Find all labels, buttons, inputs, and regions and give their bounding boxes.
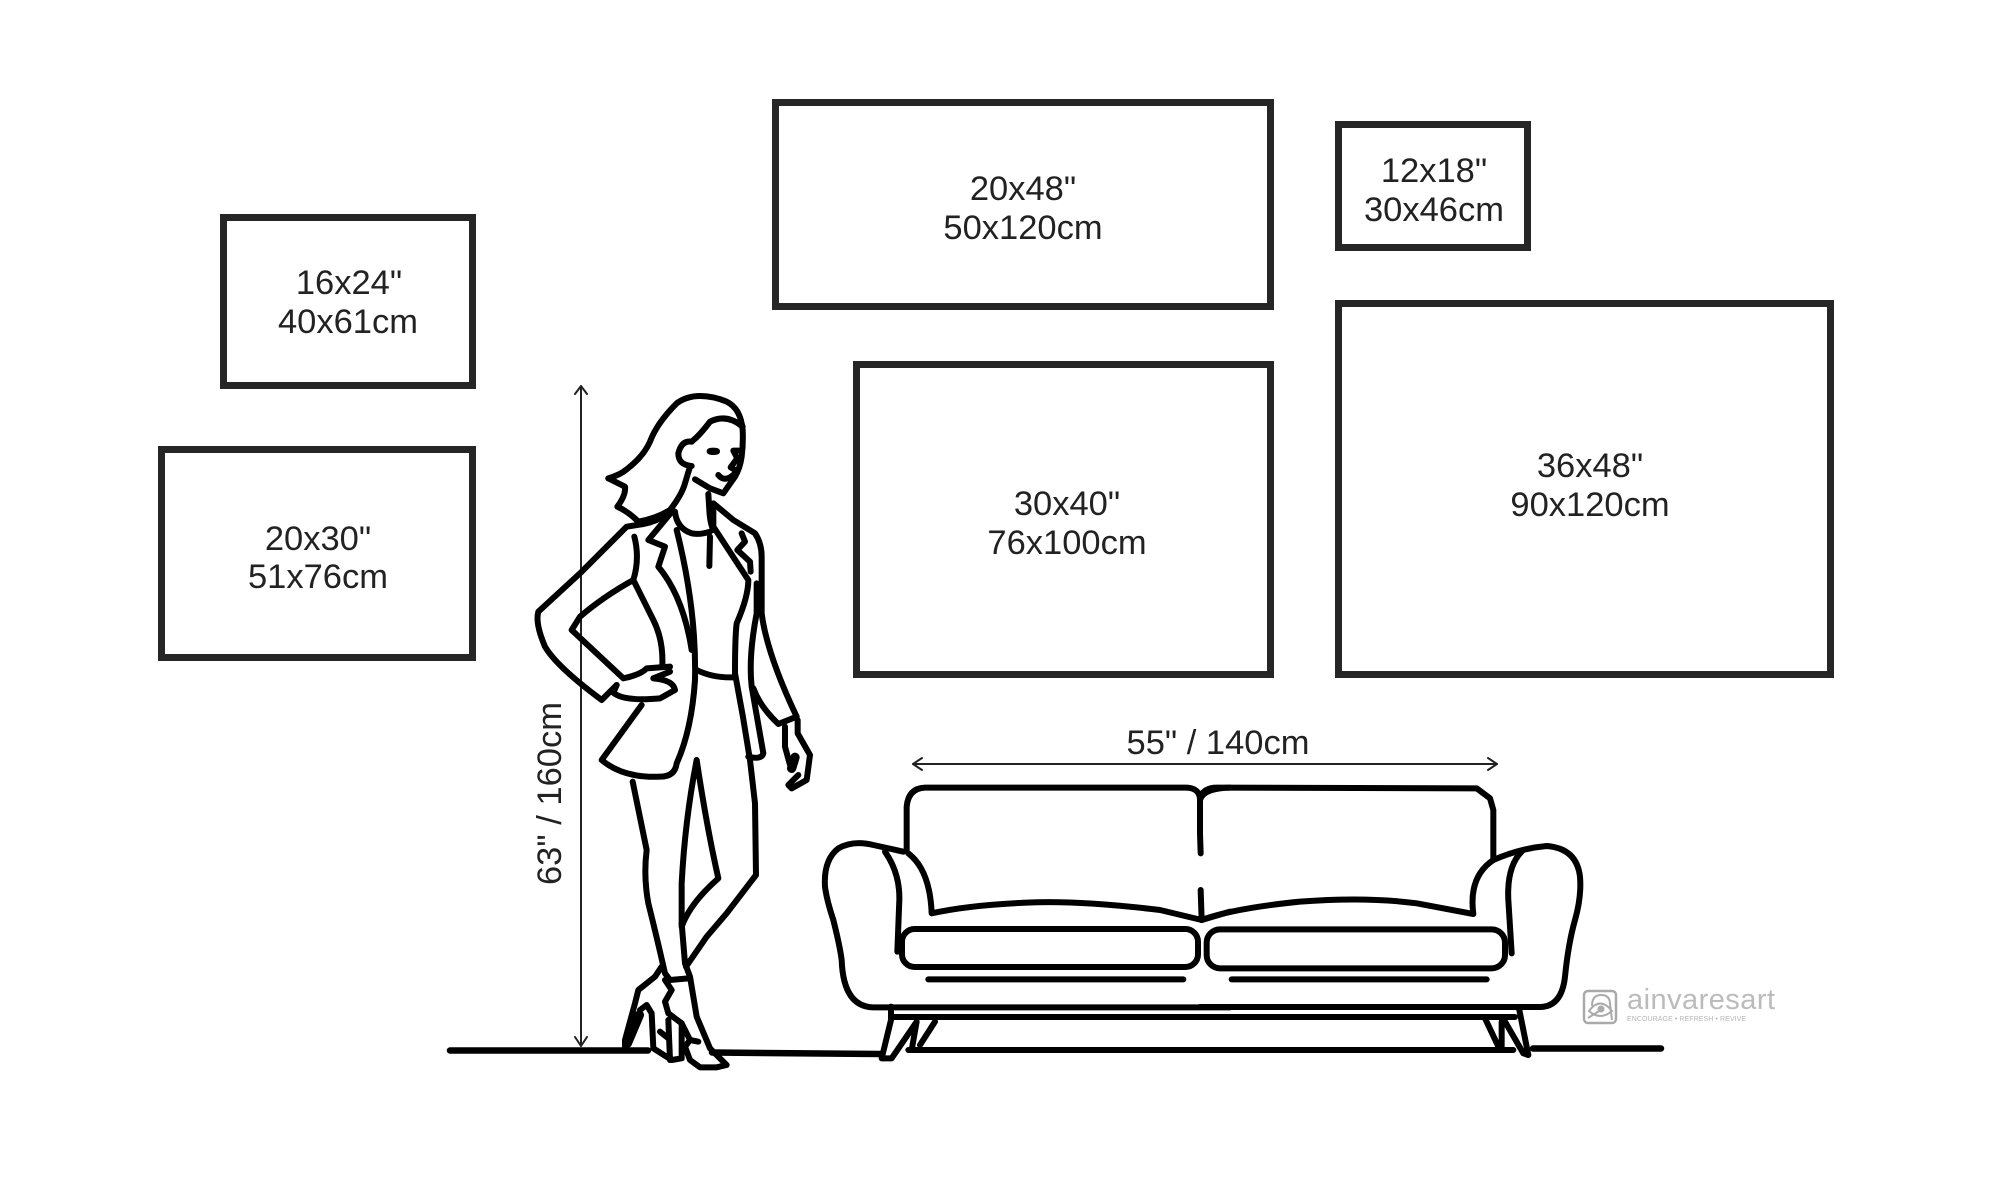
frame: 20x48: 50x120cm: [943, 209, 1103, 247]
height label: 63" / 160cm: [531, 702, 569, 885]
width label: 55" / 140cm: [1127, 724, 1309, 762]
frame: 36x48: 36x48": [1537, 447, 1643, 485]
sofa: left half: [825, 788, 1230, 1058]
frame: 20x30: 51x76cm: [248, 558, 388, 596]
frame: 12x18: 12x18": [1381, 152, 1487, 190]
watermark logo: [1584, 984, 1775, 1023]
frame: 16x24: 40x61cm: [278, 303, 418, 341]
frame: 30x40: 76x100cm: [987, 524, 1147, 562]
frame: 30x40: [856, 364, 1270, 674]
width arrow: [913, 758, 1497, 770]
frame: 36x48: [1338, 304, 1830, 674]
frame: 20x48: [776, 102, 1270, 306]
frame: 12x18: [1338, 124, 1528, 248]
icon: eye logo: [1584, 991, 1616, 1023]
sofa: right half: [1200, 788, 1580, 1055]
height arrow: [575, 386, 587, 1046]
frame: 30x40: 30x40": [1014, 485, 1120, 523]
person: legs and shoes: [625, 760, 756, 1067]
frame: 16x24: [224, 218, 472, 386]
frame: 12x18: 30x46cm: [1364, 191, 1504, 229]
frame: 20x30: 20x30": [265, 520, 371, 558]
right hand: [785, 720, 810, 788]
watermark logo: ENCOURAGE • REFRESH • REVIVE: [1627, 1016, 1746, 1023]
frame: 36x48: 90x120cm: [1510, 486, 1670, 524]
floor line: [450, 1048, 1661, 1054]
frame: 16x24: 16x24": [296, 264, 402, 302]
frame: 20x30: [162, 450, 472, 658]
frame: 20x48: 20x48": [970, 170, 1076, 208]
watermark logo: ainvaresart: [1627, 984, 1775, 1016]
person: upper body: [537, 396, 810, 788]
